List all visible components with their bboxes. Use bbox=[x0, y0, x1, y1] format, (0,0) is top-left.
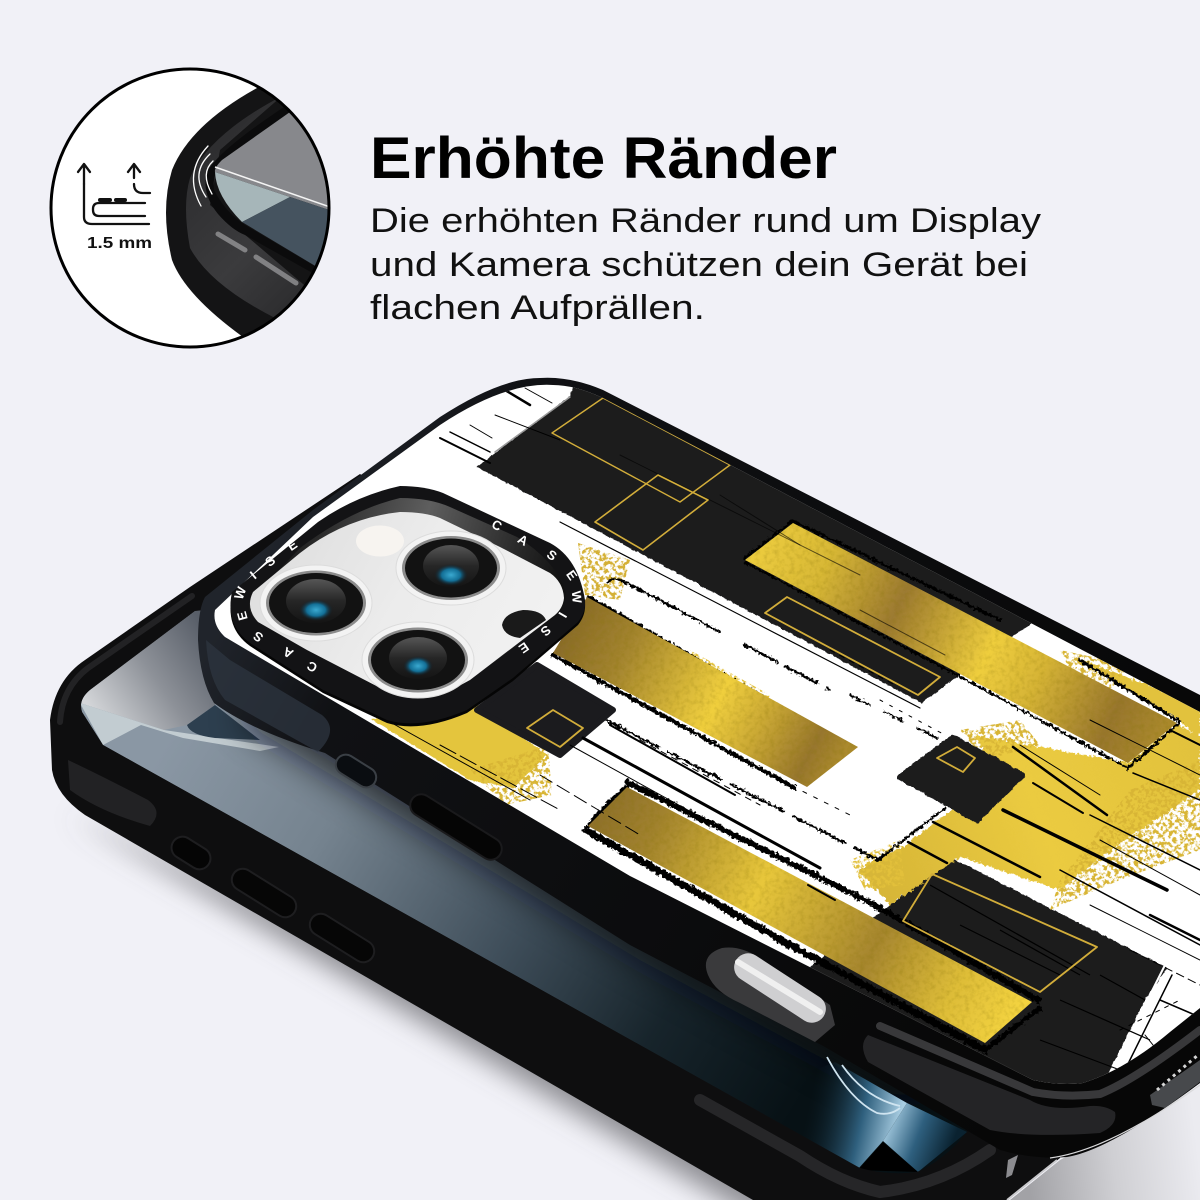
print: fine scratches bbox=[390, 388, 1200, 1080]
inset: screen pale area bbox=[215, 172, 290, 222]
lower phone rim sheen bbox=[60, 596, 192, 722]
camera module bbox=[230, 486, 585, 726]
print: gold bar middle bbox=[553, 597, 858, 787]
inset: screen upper glass bbox=[214, 112, 328, 210]
shadow under upper phone on the background bbox=[1010, 1085, 1200, 1200]
inset: circle outline bbox=[51, 69, 329, 347]
inset: screen dark area bbox=[242, 197, 328, 266]
print: black upper block bbox=[477, 380, 1040, 703]
upper phone rim highlight bbox=[880, 1026, 1200, 1096]
upper phone body bbox=[198, 378, 1200, 1158]
print: yellow foil upper right bbox=[1083, 660, 1200, 740]
description text bbox=[370, 202, 1041, 327]
camera: lens bottom bbox=[362, 622, 474, 698]
screen: pale reflection band bbox=[80, 703, 279, 751]
lower phone side port bbox=[1006, 1155, 1018, 1178]
lower phone bottom-right metal edge bbox=[1007, 1160, 1057, 1200]
lower phone screen bbox=[80, 600, 1000, 1173]
upper phone carbon corner bbox=[206, 640, 330, 752]
button: volume up bbox=[228, 865, 300, 921]
camera: rim lettering right: CASEWISE bbox=[489, 516, 585, 657]
description text: und Kamera schützen dein Gerät bei bbox=[370, 246, 1028, 284]
title: Erhöhte Ränder bbox=[370, 126, 837, 191]
button: power bbox=[406, 790, 506, 864]
print: black lower block bbox=[808, 857, 1167, 1095]
inset: glass reflection line bbox=[215, 167, 330, 207]
inset: raised edge icon bbox=[78, 164, 150, 224]
lower phone side buttons bbox=[167, 833, 378, 966]
print: yellow foil near camera bbox=[371, 705, 547, 788]
upper phone carbon pad bottom corner bbox=[863, 1035, 1115, 1135]
camera: microphone hole bbox=[502, 610, 546, 638]
print: black square near camera bbox=[477, 665, 613, 755]
printed case back bbox=[190, 370, 1200, 1100]
lower phone body bbox=[50, 474, 1060, 1200]
inset circle: raised edge detail bbox=[51, 60, 345, 347]
print: gold bar lower bbox=[588, 787, 1032, 1043]
print: gold outline rectangles bbox=[527, 398, 1097, 992]
print: black outline strokes (rough) bbox=[553, 521, 1180, 1050]
camera: ring face bbox=[230, 486, 585, 723]
camera: flash bbox=[356, 526, 404, 556]
camera: lens left bbox=[260, 565, 372, 641]
camera: plate bbox=[250, 512, 564, 696]
inset: white disc bbox=[51, 69, 329, 347]
camera: ring underside bbox=[230, 489, 585, 726]
description text: flachen Aufprällen. bbox=[370, 289, 705, 327]
camera: rim lettering left: CASEWISE bbox=[231, 536, 320, 676]
inset: bumper face bbox=[186, 96, 310, 318]
screen: wallpaper light beams bbox=[813, 1056, 966, 1172]
camera: inner wall bbox=[249, 498, 566, 697]
print: gold bar top bbox=[745, 523, 1177, 763]
button: ringer switch bbox=[332, 751, 380, 791]
print: white base bbox=[190, 370, 1200, 1100]
screen: dark notch bbox=[187, 705, 260, 740]
screen: upper glass wedge bbox=[81, 610, 216, 730]
lower phone carbon corner highlight bbox=[68, 760, 157, 826]
button: action bbox=[167, 833, 215, 873]
screen: shadow cast by upper phone bbox=[225, 711, 787, 1040]
upper phone charging port bbox=[706, 947, 835, 1042]
upper phone outer edge glint bbox=[1050, 1085, 1200, 1158]
inset: inner bezel bbox=[206, 108, 314, 272]
button: volume down bbox=[306, 910, 378, 966]
inset: impact arcs bbox=[193, 146, 213, 206]
print: dark scratches on lower black block bbox=[930, 885, 1150, 1070]
inset: bumper highlight bbox=[218, 234, 296, 283]
inset: case corner bbox=[166, 88, 328, 336]
inset: 1.5 mm label: 1.5 mm bbox=[87, 235, 152, 252]
print: black square centre right bbox=[900, 738, 1022, 820]
lower phone bottom bezel sheen bbox=[700, 1100, 990, 1192]
upper phone speaker grille bbox=[1150, 1055, 1200, 1108]
description text: Die erhöhten Ränder rund um Display bbox=[370, 202, 1041, 240]
print: yellow foil right bbox=[858, 723, 1200, 905]
print: gold bars with foil texture bbox=[553, 523, 1177, 1043]
camera: lens right bbox=[396, 531, 506, 605]
print: gold flecks bbox=[470, 543, 1200, 910]
upper phone side buttons bbox=[332, 751, 506, 864]
drop shadow under lower phone bbox=[70, 815, 1000, 1200]
